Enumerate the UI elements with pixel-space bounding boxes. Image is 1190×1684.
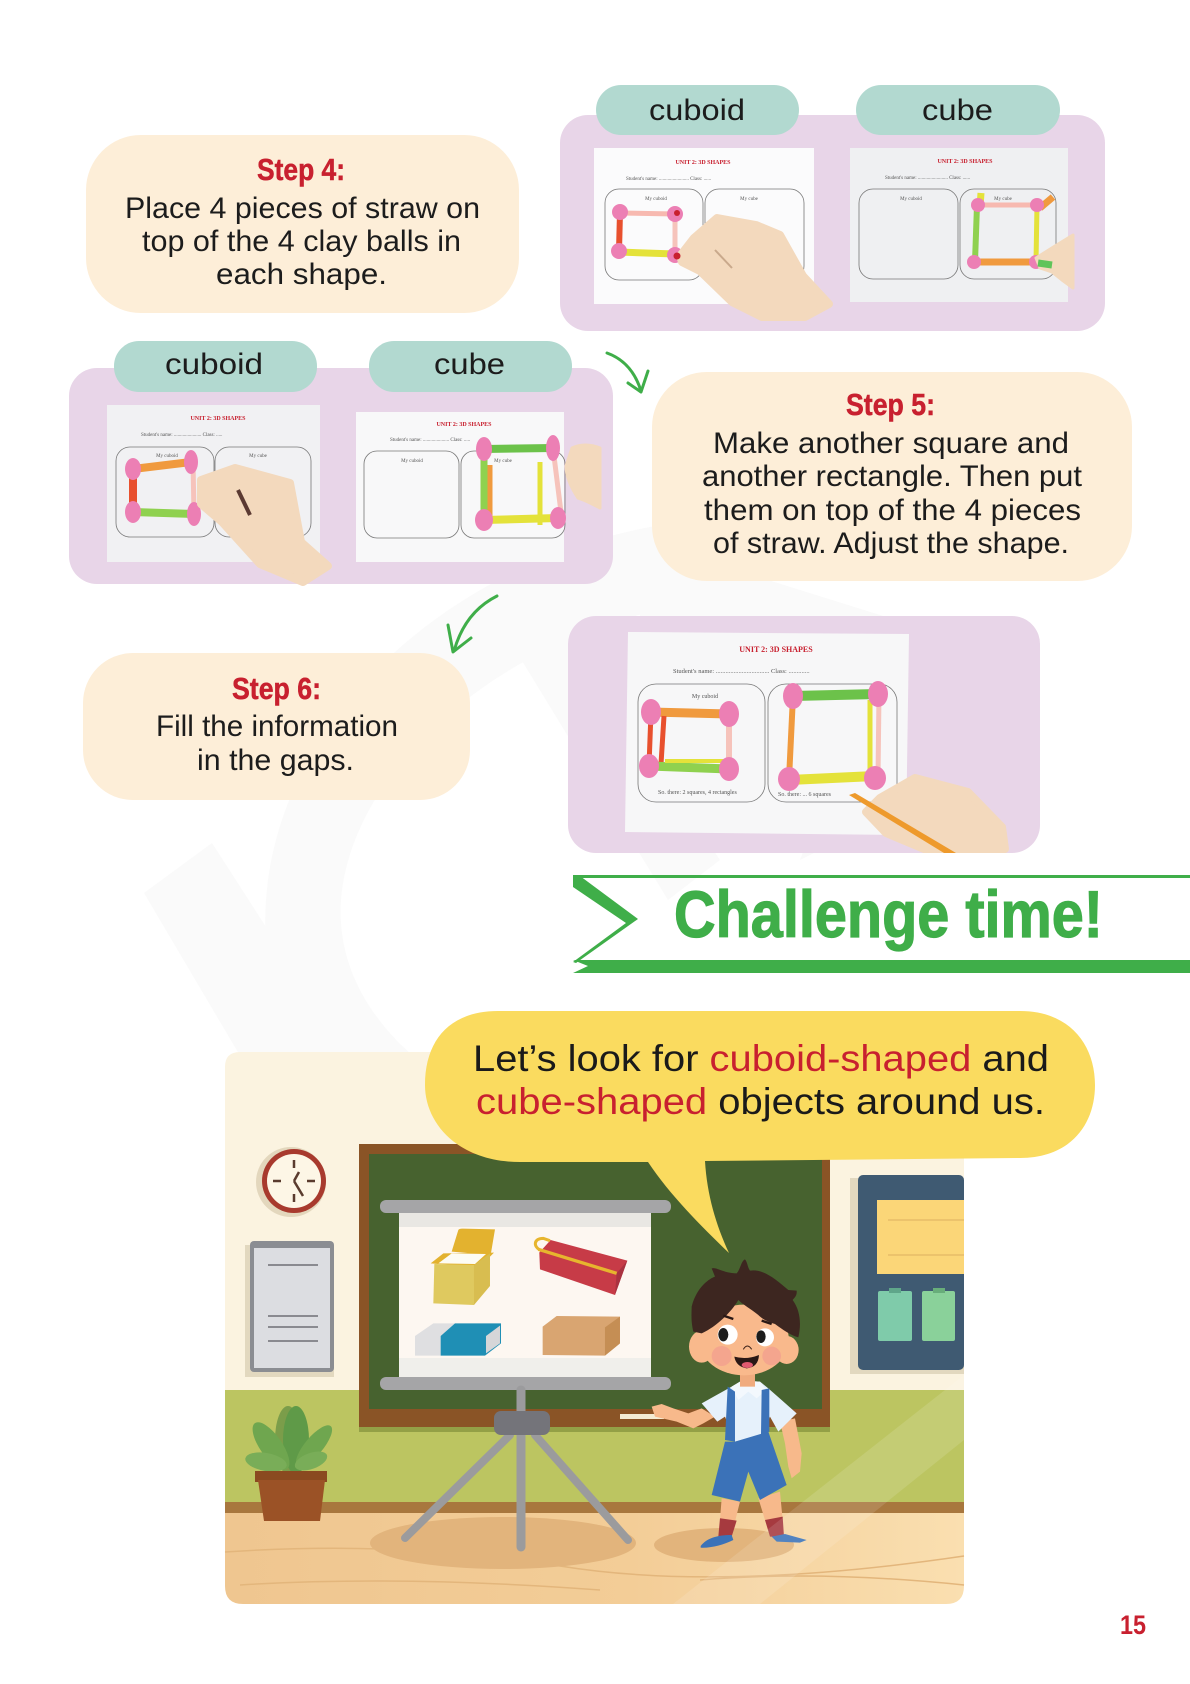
photo: cuboid worksheet with hand: Student's name: ........................ Class: ......: [626, 177, 711, 182]
speech bubble: [425, 1011, 1095, 1253]
photo: cube frame with hand: [356, 412, 600, 562]
text block: step 6: [83, 653, 470, 800]
boy shirt and overalls: [702, 1381, 797, 1502]
photo: cuboid frame with hand: UNIT 2: 3D SHAPES: [190, 416, 246, 422]
illustration: classroom: [225, 1011, 1095, 1604]
photo: cuboid worksheet with hand: UNIT 2: 3D SHAPES: [675, 160, 731, 166]
photo: completed worksheet: So. there: 2 squares, 4 rectangles: [658, 790, 737, 796]
photo: completed worksheet: Student's name: ................................. Class: .............: [673, 668, 810, 675]
photo: cuboid worksheet with hand: My cuboid: [645, 197, 667, 202]
text block: step 6: in the gaps.: [197, 744, 354, 777]
text block: step 5: Make another square and: [713, 427, 1069, 460]
text block: step 5: them on top of the 4 pieces: [704, 494, 1081, 527]
label: cuboid chip top: cuboid: [649, 94, 745, 127]
tripod stand: [405, 1390, 628, 1547]
photo: cube frame with hand: My cube: [494, 459, 513, 464]
clock: [256, 1147, 326, 1217]
object: eraser book: [415, 1323, 501, 1356]
label: cube chip top: [856, 85, 1060, 135]
text block: step 5: another rectangle. Then put: [702, 460, 1083, 493]
blackboard: [359, 1144, 830, 1432]
photo: completed worksheet: UNIT 2: 3D SHAPES: [739, 645, 813, 654]
photo: completed worksheet: My cuboid: [692, 694, 718, 700]
watermark: [144, 520, 960, 1420]
text block: step 4: Step 4:: [257, 152, 345, 187]
photo: cube frame with hand: My cuboid: [401, 459, 423, 464]
photo: completed worksheet: [625, 632, 1005, 853]
photo: cuboid worksheet with hand: My cube: [740, 197, 759, 202]
boy head: [689, 1259, 800, 1387]
arrow: step 4 to step 5: [607, 353, 648, 392]
right bulletin board: [850, 1175, 964, 1374]
photo: cube worksheet with hand: UNIT 2: 3D SHAPES: [937, 159, 993, 165]
speech bubble: cube-shaped objects around us.: [476, 1081, 1045, 1122]
text block: step 4: Place 4 pieces of straw on: [125, 192, 480, 225]
label: cuboid chip middle: cuboid: [165, 348, 263, 381]
photo: cuboid frame with hand: My cube: [249, 454, 268, 459]
photo: cuboid frame with hand: [107, 405, 328, 582]
notice paper: [245, 1241, 334, 1377]
object: pencil case: [535, 1238, 627, 1295]
photo: cube frame with hand: UNIT 2: 3D SHAPES: [436, 422, 492, 428]
label: cube chip middle: cube: [434, 348, 505, 381]
photo: cube worksheet with hand: [850, 148, 1073, 302]
wall and floor: [225, 1052, 964, 1604]
photo: cuboid frame with hand: Student's name: ...................... Class: .....: [141, 433, 222, 438]
panel: step 5 photos: [69, 341, 613, 584]
object: chalk box: [431, 1229, 495, 1305]
boy legs and shoes: [701, 1492, 807, 1548]
photo: completed worksheet: So. there: ... 6 squares: [778, 792, 832, 798]
light streak overlay: [673, 1375, 964, 1604]
photo: cube worksheet with hand: My cube: [994, 197, 1013, 202]
object: cardboard box: [543, 1316, 620, 1356]
text block: step 4: each shape.: [216, 258, 387, 291]
label: cuboid chip top: [596, 85, 799, 135]
photo: cube frame with hand: Student's name: ..................... Class: .....: [390, 438, 470, 443]
banner: challenge time: [573, 875, 1190, 973]
speech bubble: Let’s look for cuboid-shaped and: [473, 1038, 1049, 1079]
photo: cube worksheet with hand: My cuboid: [900, 197, 922, 202]
character: boy: [652, 1259, 807, 1548]
photo: cuboid worksheet with hand: [594, 148, 829, 317]
banner: challenge time: Challenge time!: [674, 877, 1103, 951]
text block: step 5: of straw. Adjust the shape.: [713, 527, 1069, 560]
text block: step 4: top of the 4 clay balls in: [142, 225, 461, 258]
photo: cuboid frame with hand: My cuboid: [156, 454, 178, 459]
panel: step 4 photos: [560, 85, 1105, 331]
text block: step 4: [86, 135, 519, 313]
arrow: step 5 to step 6: [448, 596, 497, 652]
label: cube chip top: cube: [922, 94, 993, 127]
text block: step 5: Step 5:: [846, 387, 935, 422]
panel: step 6 photo: [568, 616, 1040, 853]
text block: step 5: [652, 372, 1132, 581]
text block: step 6: Fill the information: [156, 710, 398, 743]
label: cuboid chip middle: [114, 341, 317, 392]
page number: 15: [1120, 1610, 1146, 1640]
label: cube chip middle: [369, 341, 572, 392]
text block: step 6: Step 6:: [232, 671, 321, 706]
plant: [244, 1406, 338, 1521]
projection screen: [380, 1200, 671, 1390]
photo: cube worksheet with hand: Student's name: ........................ Class: ......: [885, 176, 970, 181]
boy arms: [652, 1404, 802, 1478]
